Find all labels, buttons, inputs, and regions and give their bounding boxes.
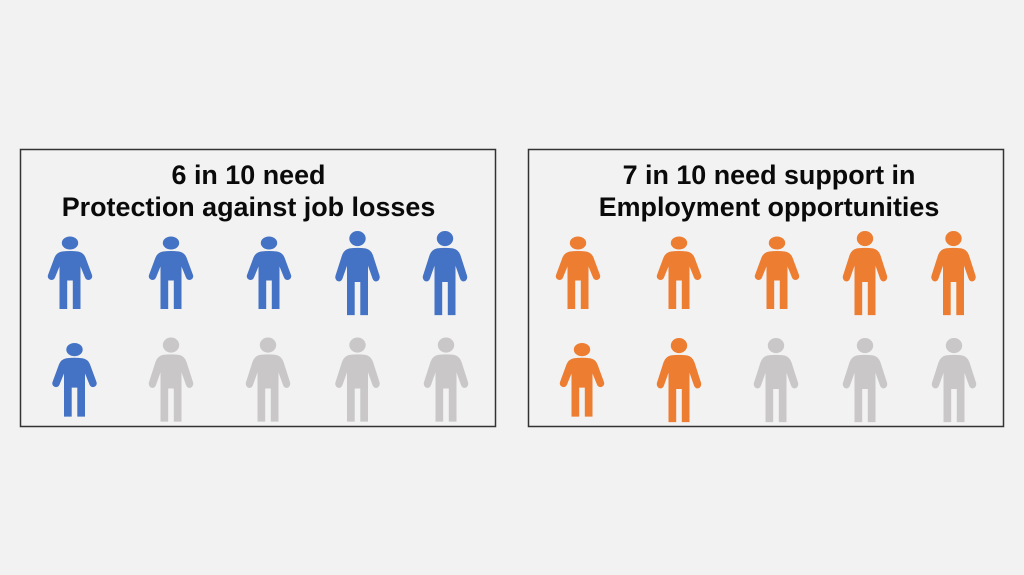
heading: 6 in 10 need protection: 6 in 10 need [172,160,325,190]
heading: 7 in 10 need support: 7 in 10 need support in [623,160,915,190]
pictogram: 6 of 10 blue, 4 grey [48,231,468,422]
heading: 7 in 10 need support: Employment opportunities [599,192,939,222]
heading: 6 in 10 need protection: Protection against job losses [62,192,435,222]
panel: job losses [20,150,496,426]
heading: 7 in 10 need support [599,160,939,222]
heading: 6 in 10 need protection [62,160,435,222]
panel: employment [528,150,1004,426]
pictogram: 7 of 10 orange, 3 grey [556,231,976,422]
